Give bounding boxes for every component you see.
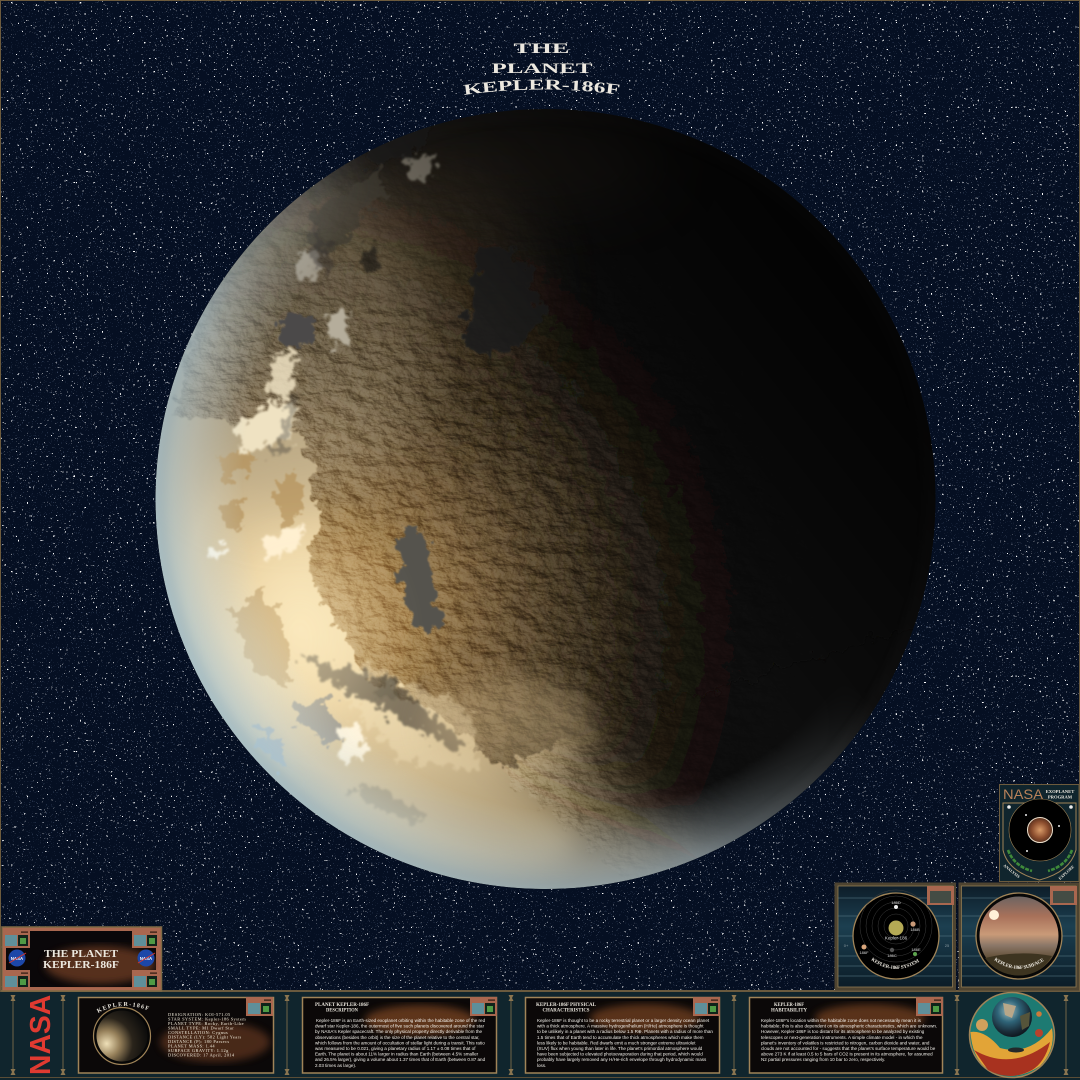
description text: was measured to be 0.021, giving a planetary radius of 1.17 ± 0.08 times that of	[315, 1046, 476, 1051]
physical text: with a thick atmosphere. A massive hydrogen/helium (H/He) atmosphere is thought	[537, 1024, 704, 1029]
system labels: Kepler-186	[885, 936, 908, 940]
description text: which follows from the amount of occultation of stellar light during a transit. This ratio	[315, 1040, 485, 1045]
title	[463, 41, 620, 95]
planet facts: STAR SYSTEM: Kepler-186 System	[168, 1016, 246, 1022]
lit plateau bloom	[425, 677, 595, 773]
panel: exoplanet program badge	[1000, 784, 1079, 882]
dark lake	[462, 247, 545, 353]
title: THE	[514, 41, 570, 57]
physical text: (XUV) flux when young than later in life. The planet's primordial atmosphere would	[537, 1046, 703, 1051]
physical heading	[536, 1003, 597, 1014]
soft lower land blend	[516, 629, 913, 869]
clouds	[205, 152, 480, 770]
left NASA meatball: NASA	[11, 956, 24, 961]
physical heading: KEPLER-186F PHYSICAL	[536, 1003, 597, 1008]
planet facts: DISTANCE (LY): 582 Light Years	[168, 1034, 242, 1040]
description text	[315, 1018, 486, 1068]
badge small planet	[1028, 818, 1052, 842]
plate title text: THE PLANET	[44, 949, 118, 960]
habitability text: However, Kepler-186F is too distant for its atmosphere to be analyzed by existing	[761, 1029, 925, 1034]
description text: by NASA's Kepler spacecraft. The only physical property directly derivable from the	[315, 1029, 483, 1034]
panel: planet data	[78, 996, 274, 1074]
right NASA meatball	[138, 950, 155, 966]
planet facts: SURFACE GRAVITY: 1.12g	[168, 1048, 229, 1053]
badge heading: EXOPLANET	[1046, 789, 1074, 794]
panel: Kepler-186 system	[834, 882, 956, 990]
system labels: 25	[945, 943, 950, 948]
physical text	[537, 1018, 713, 1068]
description heading: DESCRIPTION	[326, 1008, 358, 1014]
NASA worm logo: NASA	[23, 995, 56, 1075]
badge shield	[1003, 803, 1076, 880]
description text: Kepler-186F is an Earth-sized exoplanet orbiting within the habitable zone of the red	[316, 1018, 486, 1023]
terminator shade	[403, 109, 936, 692]
description heading	[315, 1003, 369, 1014]
ornamental column dividers	[10, 995, 1068, 1075]
badge motto	[1002, 863, 1075, 881]
badge NASA logo: NASA	[1003, 787, 1043, 802]
planet ocean base	[156, 330, 728, 889]
habitability text: habitable; this is also dependent on its atmospheric characteristics, which are unknown.	[761, 1024, 937, 1029]
habitability text: planet's inventory of volatiles is restricted to nitrogen, carbon dioxide and water, and	[761, 1040, 930, 1045]
mini planet	[94, 1008, 150, 1064]
physical heading: CHARACTERISTICS	[542, 1008, 590, 1014]
system labels: 186C	[887, 953, 897, 958]
planet facts: DESIGNATION: KOI-571.05	[168, 1012, 231, 1017]
plate title text: KEPLER-186F	[43, 960, 119, 971]
system labels: 186F	[859, 950, 869, 955]
system labels	[844, 900, 950, 958]
panel: title plate	[2, 927, 162, 991]
habitability text: clouds are not accounted for - suggests that the planet's surface temperature would be	[761, 1046, 936, 1051]
surface round image	[976, 893, 1062, 979]
habitability heading	[771, 1003, 807, 1014]
title: KEPLER-186F	[463, 80, 620, 95]
badge motto: EXPLORE	[1057, 864, 1075, 881]
physical text: loss.	[537, 1063, 546, 1068]
land warm centre wash	[352, 174, 546, 380]
description text: dwarf star Kepler-186, the outermost of five such planets discovered around the star	[315, 1024, 485, 1029]
planet facts: PLANET TYPE: Rocky, Earth-Like	[168, 1021, 244, 1027]
lower limb brightness	[346, 782, 582, 870]
physical text: have been subjected to elevated photoevaporation during that period, which would	[537, 1052, 703, 1057]
planet facts: SMALL TYPE: M1 Dwarf Star	[168, 1026, 234, 1030]
panel: Kepler-186F surface	[958, 882, 1079, 990]
land islands	[218, 452, 302, 690]
badge stars	[1007, 805, 1073, 852]
physical text: 1.5 times that of Earth tend to accumulate the thick atmospheres which make them	[537, 1035, 704, 1040]
habitability text: N2 partial pressures ranging from 10 bar to zero, respectively.	[761, 1057, 885, 1062]
description text: and 26.5% larger), giving a volume about 1.37 times that of Earth (between 0.87 and	[315, 1057, 486, 1062]
planet facts: DISTANCE (P): 180 Parsecs	[168, 1039, 230, 1044]
terrain relief	[173, 208, 680, 864]
right NASA meatball: NASA	[140, 956, 153, 961]
panel: planet description	[302, 997, 497, 1073]
planet facts	[168, 1012, 246, 1058]
description text: 2.03 times as large).	[315, 1063, 356, 1068]
badge laurels	[1008, 850, 1072, 871]
panel: physical characteristics	[526, 997, 720, 1073]
planet facts: CONSTELLATION: Cygnus	[168, 1030, 228, 1035]
plate title text	[43, 949, 119, 971]
physical text: probably have largely removed any H/He-rich envelope through hydrodynamic mass	[537, 1057, 707, 1062]
top cap faint wash	[390, 139, 532, 180]
physical text: Kepler-186F is thought to be a rocky terrestrial planet or a larger density ocean planet	[537, 1018, 710, 1023]
corner tiles	[3, 929, 159, 989]
badge heading	[1046, 789, 1074, 800]
curved panel name: KEPLER-186F	[96, 1002, 150, 1013]
dark seas upper left	[258, 115, 445, 770]
description text: observations (besides the orbit) is the size of the planet relative to the central star,	[315, 1035, 480, 1040]
planet land mass	[172, 109, 924, 770]
planet facts: DISCOVERED: 17 April, 2014	[168, 1052, 235, 1058]
habitability heading: KEPLER-186F	[774, 1003, 804, 1008]
right limb faint glow	[156, 391, 290, 794]
round mission patch	[970, 992, 1054, 1078]
badge black disc	[1009, 799, 1071, 861]
system labels: 186D	[891, 900, 901, 905]
habitability text: Kepler-186F's location within the habitable zone does not necessarily mean it is	[761, 1018, 922, 1023]
description text: Earth. The planet is about 11% larger in radius than Earth (between 4.5% smaller	[315, 1052, 479, 1057]
habitability text: above 273 K if at least 0.5 to 5 bars of CO2 is present in its atmosphere, for assumed	[761, 1052, 933, 1057]
land lit upper-left wash	[150, 170, 430, 510]
system labels: 0+	[844, 943, 849, 948]
description heading: PLANET KEPLER-186F	[315, 1003, 369, 1008]
bottom strip background	[0, 990, 1080, 1080]
system caption: KEPLER-186F SYSTEM	[871, 957, 920, 969]
system labels: 186E	[911, 947, 921, 952]
planet Kepler-186F	[156, 109, 936, 889]
habitability heading: HABITABILITY	[771, 1008, 807, 1014]
system orbit disc	[853, 890, 939, 979]
system labels: 186B	[910, 927, 920, 932]
badge motto: ANALYSIS	[1002, 863, 1022, 879]
physical text: less likely to be habitable. Red dwarfs emit a much stronger extreme ultraviolet	[537, 1040, 696, 1045]
atmosphere rim	[156, 164, 860, 889]
badge heading: PROGRAM	[1048, 794, 1073, 800]
habitability text: telescopes or next-generation instruments. A simple climate model - in which the	[761, 1035, 923, 1040]
left NASA meatball	[8, 950, 26, 966]
panel: habitability	[750, 997, 943, 1073]
surface caption: KEPLER-186F SURFACE	[994, 957, 1044, 969]
dark cloud bands	[270, 225, 470, 822]
planet facts: PLANET MASS: 1.44	[168, 1044, 215, 1048]
soft highlight bloom	[230, 550, 370, 730]
habitability text	[761, 1018, 937, 1062]
physical text: to be unlikely in a planet with a radius below 1.5 R⊕. Planets with a radius of more than	[537, 1029, 713, 1034]
title: PLANET	[492, 61, 592, 77]
